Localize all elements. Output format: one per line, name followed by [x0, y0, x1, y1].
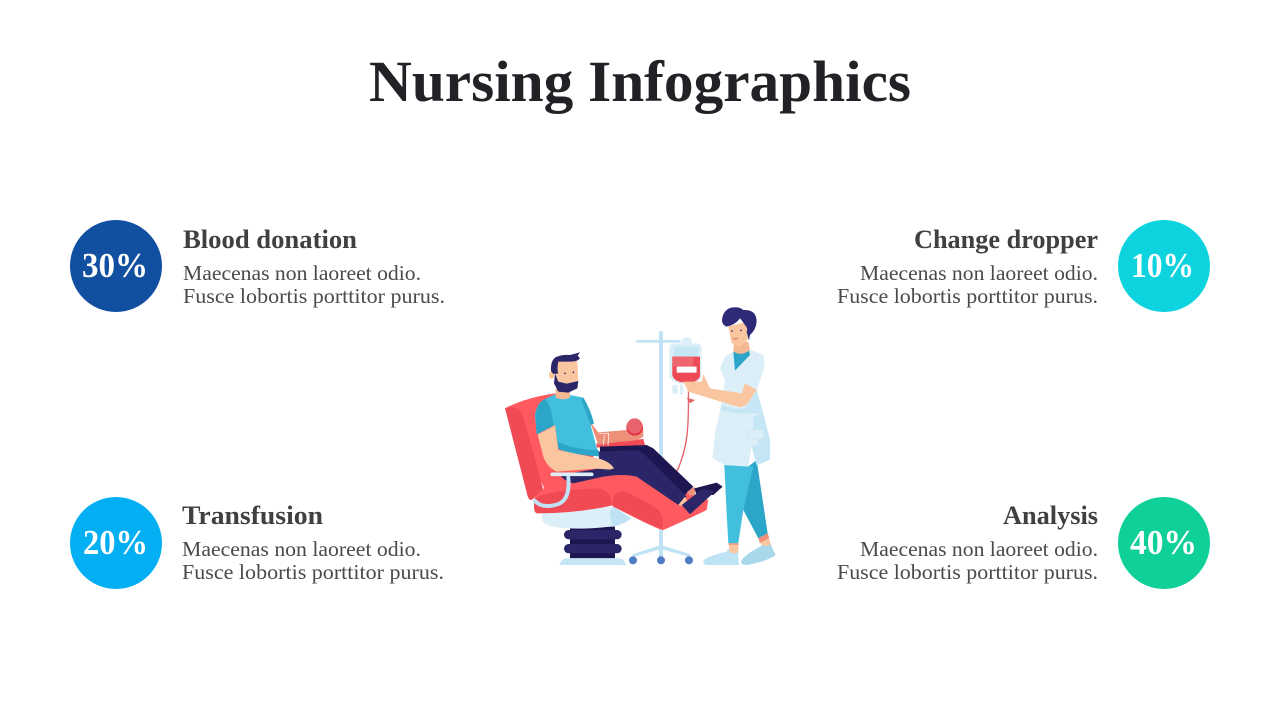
heading: change dropper: Change dropper — [914, 225, 1098, 254]
text: transfusion description: Fusce lobortis porttitor purus. — [182, 560, 444, 584]
nurse tunic — [712, 347, 770, 467]
badge: 20% — [70, 497, 162, 589]
armrest — [535, 474, 592, 506]
heading: blood donation: Blood donation — [183, 225, 358, 254]
panel: analysis — [837, 497, 1210, 589]
donor head — [549, 352, 580, 399]
red chair — [505, 393, 708, 530]
text: transfusion description — [182, 537, 444, 584]
text: blood donation description: Fusce lobortis porttitor purus. — [183, 284, 445, 308]
text: blood donation description: Maecenas non laoreet odio. — [183, 261, 421, 285]
heading: analysis: Analysis — [1003, 501, 1098, 530]
text: change dropper description: Maecenas non laoreet odio. — [860, 261, 1098, 285]
blood bag and tube — [669, 337, 702, 472]
nurse arm holding bag — [683, 374, 757, 407]
badge: 30%: 30% — [82, 246, 148, 285]
donor shirt — [535, 394, 599, 456]
panel: transfusion — [70, 497, 444, 589]
badge: 40% — [1118, 497, 1210, 589]
IV stand — [629, 331, 693, 564]
chair pedestal — [542, 507, 632, 565]
nurse — [683, 307, 776, 565]
badge: 40%: 40% — [1130, 523, 1197, 562]
text: analysis description — [837, 537, 1098, 584]
nurse shoes — [703, 539, 776, 565]
title: Nursing Infographics — [369, 49, 911, 114]
badge: 10%: 10% — [1131, 246, 1194, 285]
badge: 30% — [70, 220, 162, 312]
text: change dropper description — [837, 261, 1098, 308]
badge: 10% — [1118, 220, 1210, 312]
donor — [535, 352, 723, 514]
text: analysis description: Fusce lobortis porttitor purus. — [837, 560, 1098, 584]
donor near arm — [538, 425, 614, 472]
heading: transfusion: Transfusion — [182, 501, 324, 530]
badge: 20%: 20% — [83, 523, 148, 562]
nurse head and neck — [722, 307, 757, 354]
nurse trousers — [724, 460, 769, 545]
text: blood donation description — [183, 261, 445, 308]
panel: change dropper — [837, 220, 1210, 312]
text: transfusion description: Maecenas non laoreet odio. — [182, 537, 421, 561]
panel: blood donation — [70, 220, 445, 312]
text: change dropper description: Fusce lobortis porttitor purus. — [837, 284, 1098, 308]
donor far arm and squeeze ball — [590, 418, 643, 446]
text: analysis description: Maecenas non laoreet odio. — [860, 537, 1098, 561]
donor legs — [560, 445, 723, 514]
illustration: nurse changing blood bag for seated donor — [505, 307, 776, 565]
